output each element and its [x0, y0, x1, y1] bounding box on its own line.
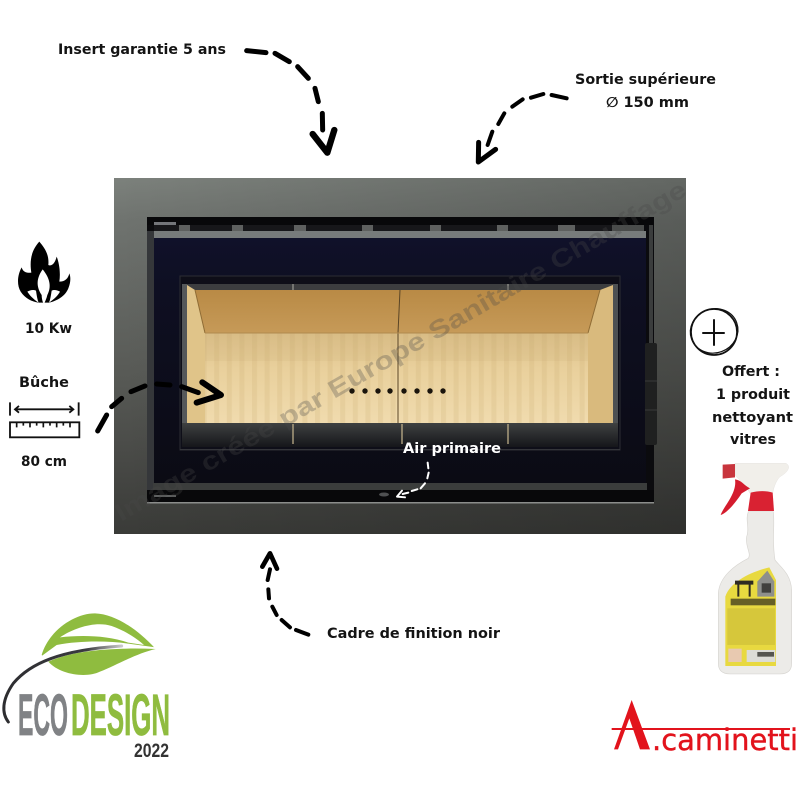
- fireplace insert: [110, 175, 691, 534]
- label pictures: [735, 581, 753, 597]
- text: DESIGN: [71, 683, 170, 748]
- label: offer: Offert :: [722, 364, 780, 380]
- air holes: [349, 388, 446, 394]
- label: insert garantie: Insert garantie 5 ans: [58, 42, 226, 58]
- label: sortie superieure: ∅ 150 mm: [606, 95, 689, 111]
- spray bottle: [718, 463, 792, 674]
- year: 2022: [134, 741, 169, 762]
- label: sortie superieure: [575, 72, 716, 111]
- icon: ruler: [10, 402, 79, 437]
- icon: plus circle: [684, 302, 744, 360]
- top vent with blocks: [147, 217, 654, 231]
- outer finishing frame: [114, 178, 686, 534]
- label bottom: [728, 649, 742, 662]
- firebox ceiling: [195, 290, 600, 333]
- icon: flame: [18, 242, 70, 304]
- firebox left wall: [187, 285, 205, 423]
- glass black surround: [154, 238, 646, 483]
- side rails: [147, 231, 154, 503]
- label: offer: 1 produit: [716, 387, 790, 403]
- bottle body: [718, 512, 792, 674]
- arrow: insert garantie: [247, 51, 334, 153]
- logo letter A: [614, 700, 650, 749]
- label text bands: [731, 599, 775, 605]
- label: log length: 80 cm: [21, 454, 67, 470]
- firebox back wall: [205, 333, 588, 423]
- leaf: [4, 613, 156, 722]
- arrow: log: [98, 382, 221, 431]
- lower grey band: [182, 423, 618, 447]
- logo: caminetti: [612, 700, 798, 757]
- red collar: [748, 491, 774, 511]
- arrow: sortie superieure: [478, 94, 567, 162]
- spray head: [735, 463, 789, 493]
- air control: [379, 492, 389, 496]
- lower door bar: [153, 483, 647, 490]
- logo wordmark: .caminetti: [652, 723, 798, 757]
- logo: ecodesign: [4, 613, 170, 762]
- label: offer: nettoyant: [712, 410, 793, 426]
- label: cadre: Cadre de finition noir: [327, 626, 500, 642]
- top door bar: [153, 231, 646, 238]
- label: log: Bûche: [19, 375, 69, 391]
- arrow: cadre: [262, 553, 308, 635]
- label: offer: vitres: [730, 432, 776, 448]
- label: power: 10 Kw: [25, 321, 72, 337]
- watermark: Image créée par Europe Sanitaire Chauffage: [110, 175, 691, 527]
- door hinge: [645, 343, 657, 445]
- label: air primaire: Air primaire: [403, 441, 501, 457]
- inner opening: [147, 217, 654, 503]
- firebox opening frame: [180, 276, 620, 450]
- arrow: air primaire: [397, 463, 429, 497]
- firebox right wall: [588, 285, 613, 423]
- label: offer: [712, 364, 793, 448]
- red nozzle: [723, 464, 735, 479]
- red trigger: [721, 479, 750, 515]
- logo: ecodesign: ECO: [18, 683, 68, 748]
- joints: [195, 290, 600, 423]
- label: sortie superieure: Sortie supérieure: [575, 72, 716, 88]
- label: [725, 567, 776, 666]
